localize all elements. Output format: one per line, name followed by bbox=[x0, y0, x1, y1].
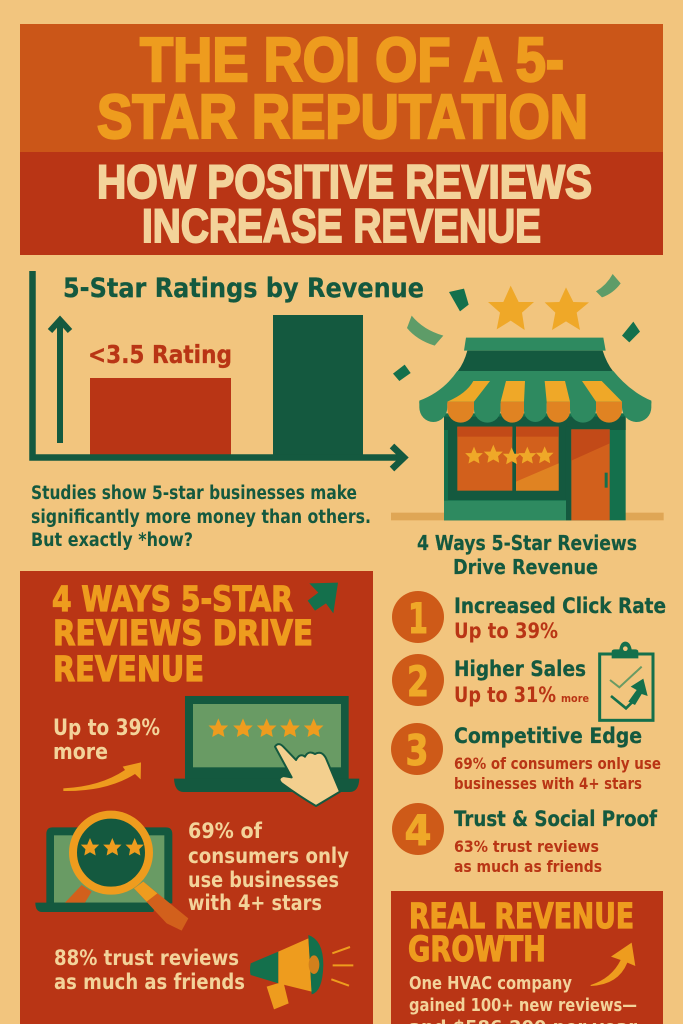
subtitle panel bbox=[20, 152, 663, 255]
item 2: higher sales bbox=[392, 654, 589, 707]
subtitle: HOW POSITIVE REVIEWS bbox=[97, 155, 592, 208]
icon: megaphone bbox=[250, 935, 353, 1009]
numbered list bbox=[391, 591, 666, 876]
item 2: higher sales: more bbox=[561, 692, 589, 705]
title: THE ROI OF A 5- bbox=[140, 26, 564, 95]
right column heading: 4 Ways 5-Star Reviews bbox=[417, 531, 637, 555]
right column heading bbox=[417, 531, 637, 579]
panel body text bbox=[409, 973, 637, 1024]
trust stat text bbox=[54, 946, 245, 995]
consumers stat text: 69% of bbox=[188, 819, 263, 844]
subtitle: INCREASE REVENUE bbox=[142, 199, 541, 252]
title: STAR REPUTATION bbox=[97, 83, 588, 152]
item 2: higher sales: Up to 31% bbox=[454, 683, 556, 707]
icon: laptop with magnifier and three stars bbox=[35, 815, 188, 931]
trust stat text: as much as friends bbox=[54, 970, 245, 995]
icon: rising arrow bbox=[591, 943, 635, 986]
item 4: trust and social proof: 4 bbox=[404, 806, 432, 855]
green bar bbox=[273, 315, 363, 455]
click stat text: Up to 39% bbox=[53, 716, 160, 741]
icon: clipboard with checks bbox=[600, 642, 653, 720]
item 1: increased click rate: Up to 39% bbox=[454, 619, 558, 643]
bar chart: 5-star ratings by revenue bbox=[32, 271, 424, 469]
chart heading: 5-Star Ratings by Revenue bbox=[63, 273, 424, 304]
intro text: Studies show 5-star businesses make bbox=[31, 483, 357, 504]
panel heading: REVIEWS DRIVE bbox=[53, 614, 313, 654]
header banner bbox=[20, 24, 663, 255]
axes with arrow bbox=[32, 271, 404, 469]
item 4: trust and social proof bbox=[392, 803, 658, 876]
red bar bbox=[90, 378, 231, 455]
panel: 4 ways 5-star reviews drive revenue bbox=[20, 571, 373, 1024]
consumers stat text: with 4+ stars bbox=[188, 891, 322, 916]
consumers stat text bbox=[188, 819, 349, 916]
item 3: competitive edge: businesses with 4+ stars bbox=[454, 774, 642, 793]
icon: green arrow bbox=[308, 583, 338, 613]
consumers stat text: use businesses bbox=[188, 868, 339, 893]
panel body text: One HVAC company bbox=[409, 973, 572, 994]
item 1: increased click rate: 1 bbox=[408, 594, 428, 643]
item 1: increased click rate bbox=[392, 591, 666, 643]
bar label: <3.5 Rating bbox=[88, 340, 232, 369]
panel body text: gained 100+ new reviews— bbox=[409, 995, 637, 1016]
window bbox=[457, 427, 559, 491]
confetti bbox=[393, 274, 640, 381]
panel heading bbox=[408, 897, 634, 970]
stars above roof bbox=[488, 286, 589, 330]
item 4: trust and social proof: as much as friends bbox=[454, 857, 602, 876]
building bbox=[444, 413, 626, 520]
icon: rising orange arrow bbox=[63, 762, 141, 791]
item 2: higher sales: Higher Sales bbox=[454, 657, 586, 681]
item 3: competitive edge: 3 bbox=[406, 726, 428, 775]
window stars bbox=[465, 445, 554, 464]
item 4: trust and social proof: Trust & Social Proof bbox=[454, 807, 658, 831]
item 4: trust and social proof: 63% trust reviews bbox=[454, 837, 599, 856]
icon: storefront with stars and confetti bbox=[391, 274, 664, 520]
door bbox=[571, 429, 610, 520]
roof bbox=[419, 338, 651, 403]
click stat text: more bbox=[53, 740, 108, 765]
panel heading bbox=[52, 580, 313, 690]
panel background bbox=[20, 571, 373, 1024]
intro text bbox=[31, 483, 371, 551]
title panel bbox=[20, 24, 663, 152]
right column heading: Drive Revenue bbox=[453, 555, 598, 579]
item 3: competitive edge: Competitive Edge bbox=[454, 724, 642, 748]
consumers stat text: consumers only bbox=[188, 844, 349, 869]
panel heading: REVENUE bbox=[53, 650, 204, 690]
icon: laptop with five stars and hand bbox=[174, 696, 359, 806]
ground shadow bbox=[391, 513, 664, 520]
panel: real revenue growth bbox=[391, 891, 663, 1024]
trust stat text: 88% trust reviews bbox=[54, 946, 239, 971]
panel heading: 4 WAYS 5-STAR bbox=[52, 580, 293, 620]
item 3: competitive edge bbox=[391, 723, 661, 793]
panel background bbox=[391, 891, 663, 1024]
title bbox=[97, 26, 588, 152]
awning bbox=[419, 381, 651, 423]
intro text: significantly more money than others. bbox=[31, 507, 371, 528]
panel heading: GROWTH bbox=[408, 930, 546, 970]
subtitle bbox=[97, 155, 592, 252]
intro text: But exactly *how? bbox=[31, 530, 193, 551]
hand cursor bbox=[275, 744, 340, 806]
click stat text bbox=[53, 716, 160, 765]
up arrow bbox=[50, 320, 70, 443]
item 2: higher sales: 2 bbox=[407, 657, 429, 706]
